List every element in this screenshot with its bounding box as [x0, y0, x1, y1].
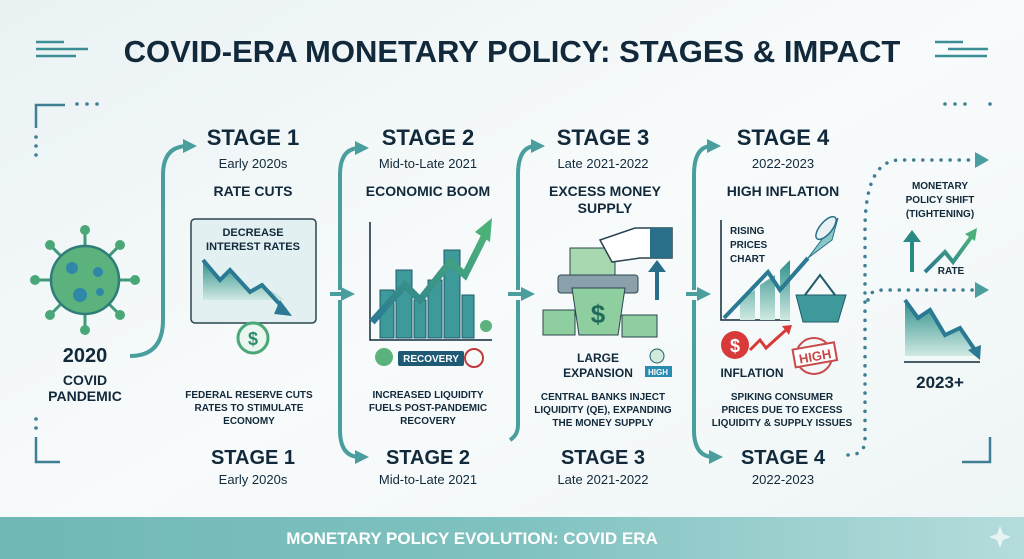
stage 3: STAGE 3 — [557, 125, 649, 150]
panel: policy shift: (TIGHTENING) — [906, 209, 974, 220]
stage 4: SPIKING CONSUMER — [731, 392, 834, 403]
stage 2: Mid-to-Late 2021 — [379, 472, 477, 487]
icon: inflation: INFLATION — [720, 366, 784, 380]
panel: policy shift: RATE — [938, 266, 965, 277]
icon: covid virus — [30, 225, 140, 335]
stage 3 — [534, 125, 672, 487]
stage 4: PRICES DUE TO EXCESS — [722, 405, 843, 416]
panel: policy shift: 2023+ — [916, 373, 964, 392]
badge: high — [645, 349, 672, 377]
stage 3: SUPPLY — [578, 200, 633, 216]
chart: rising prices — [721, 213, 846, 322]
stage 3: LIQUIDITY (QE), EXPANDING — [534, 405, 672, 416]
panel: policy shift: MONETARY — [912, 181, 968, 192]
stage 1: ECONOMY — [223, 416, 275, 427]
stage 3: STAGE 3 — [561, 447, 645, 469]
panel: decrease interest rates — [191, 219, 316, 353]
stage 3: Late 2021-2022 — [557, 156, 649, 171]
icon: money printer — [543, 228, 672, 337]
stage 1: STAGE 1 — [207, 125, 299, 150]
panel: decrease interest rates: INTEREST RATES — [206, 241, 300, 253]
badge: high: HIGH — [648, 368, 668, 377]
stage 3: Late 2021-2022 — [557, 472, 649, 487]
panel: policy shift: POLICY SHIFT — [906, 195, 974, 206]
chart: economic boom: RECOVERY — [403, 354, 459, 365]
stage 4: LIQUIDITY & SUPPLY ISSUES — [712, 418, 853, 429]
stage 4 — [712, 125, 853, 487]
text: 2020 covid pandemic: 2020 — [63, 345, 107, 367]
panel: decrease interest rates: $ — [248, 329, 258, 349]
icon: inflation: $ — [730, 336, 740, 356]
icon: money printer: $ — [591, 299, 606, 329]
decorative corners — [36, 105, 990, 462]
stage 2: Mid-to-Late 2021 — [379, 156, 477, 171]
text: 2020 covid pandemic: COVID — [63, 372, 107, 388]
text: 2020 covid pandemic: PANDEMIC — [48, 388, 122, 404]
stage 1: STAGE 1 — [211, 447, 295, 469]
stage 1: Early 2020s — [219, 472, 288, 487]
chart: rising prices: RISING — [730, 226, 765, 237]
chart: rising prices: PRICES — [730, 240, 768, 251]
chart: rising prices: CHART — [730, 254, 765, 265]
stage 2: FUELS POST-PANDEMIC — [369, 403, 487, 414]
footer banner: MONETARY POLICY EVOLUTION: COVID ERA — [286, 529, 658, 548]
stage 2: ECONOMIC BOOM — [366, 183, 490, 199]
stage 3: CENTRAL BANKS INJECT — [541, 392, 665, 403]
icon: inflation — [720, 325, 837, 380]
stage 2: INCREASED LIQUIDITY — [372, 390, 484, 401]
stage 3: EXPANSION — [563, 366, 633, 380]
footer banner — [0, 517, 1024, 559]
stage 3: EXCESS MONEY — [549, 183, 662, 199]
stage 4: 2022-2023 — [752, 472, 814, 487]
panel: decrease interest rates: DECREASE — [222, 227, 284, 239]
stage 2: STAGE 2 — [386, 447, 470, 469]
chart: economic boom — [370, 218, 492, 367]
stage 1: RATE CUTS — [213, 183, 293, 199]
stage 1: FEDERAL RESERVE CUTS — [185, 390, 313, 401]
stage 1: Early 2020s — [219, 156, 288, 171]
arrows: stage connectors — [130, 146, 714, 457]
title: COVID-ERA MONETARY POLICY: STAGES & IMPACT — [124, 34, 900, 69]
stage 4: STAGE 4 — [741, 447, 826, 469]
stage 2 — [366, 125, 492, 487]
text: 2020 covid pandemic — [48, 345, 122, 404]
stage 2: STAGE 2 — [382, 125, 474, 150]
stage 4: 2022-2023 — [752, 156, 814, 171]
stage 4: STAGE 4 — [737, 125, 830, 150]
stage 1: RATES TO STIMULATE — [195, 403, 304, 414]
stage 3: LARGE — [577, 351, 619, 365]
stage 2: RECOVERY — [400, 416, 456, 427]
icon: inflation: HIGH — [798, 346, 832, 367]
stage 3: THE MONEY SUPPLY — [552, 418, 654, 429]
stage 1 — [185, 125, 316, 487]
stage 4: HIGH INFLATION — [727, 183, 839, 199]
panel: policy shift — [903, 181, 981, 392]
